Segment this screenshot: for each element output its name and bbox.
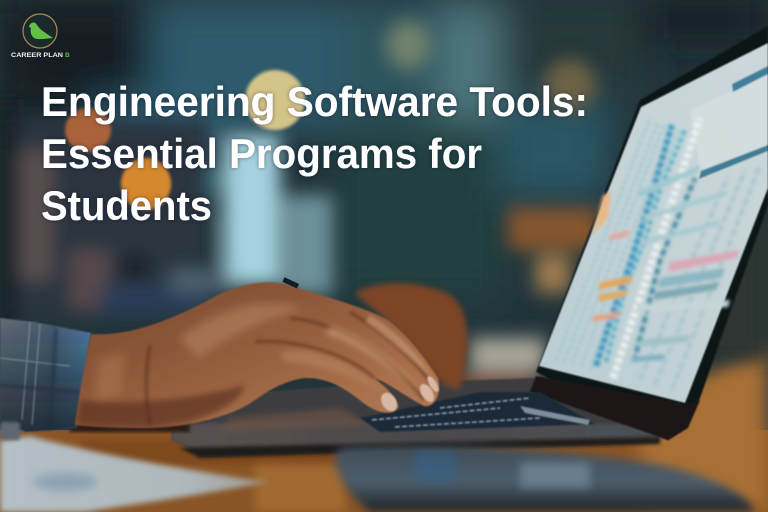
title line 3: Students [41, 182, 212, 229]
title line 2: Essential Programs for [41, 130, 482, 177]
ring glint [282, 277, 299, 289]
foreground papers and phone [0, 422, 755, 512]
near hand [75, 277, 441, 428]
plaid upper arm [18, 120, 208, 315]
spreadsheet screen [539, 43, 768, 403]
warm reflection on trackpad [220, 408, 370, 432]
wooden desk [0, 210, 768, 512]
logo ring [23, 14, 57, 48]
bright column [224, 135, 280, 285]
fingernails [378, 375, 441, 414]
icon: green bird [29, 23, 53, 39]
keyboard [360, 392, 595, 432]
laptop lid frame [536, 26, 768, 440]
highlights on knuckles and fingers [180, 303, 305, 358]
finger creases [146, 312, 432, 425]
title [41, 78, 588, 229]
title line 1: Engineering Software Tools: [41, 78, 588, 125]
laptop [172, 26, 768, 458]
table header bars [732, 66, 768, 92]
logo wordmark: CAREER PLAN [11, 52, 63, 59]
laptop base [172, 378, 668, 448]
top-right pale area [690, 75, 768, 170]
dark wrist shadow on desk [70, 424, 190, 432]
logo letter B: B [65, 52, 70, 59]
logo: Career Plan B [11, 14, 70, 59]
far hand, blurred [355, 283, 467, 388]
column stripes [556, 118, 680, 370]
coloured rows [668, 250, 740, 272]
shirt cuff [0, 318, 91, 432]
glowing light behind the screen [592, 192, 611, 235]
shadows under the palm [75, 385, 245, 428]
blue data column [596, 125, 672, 366]
hinge strip [530, 376, 700, 440]
